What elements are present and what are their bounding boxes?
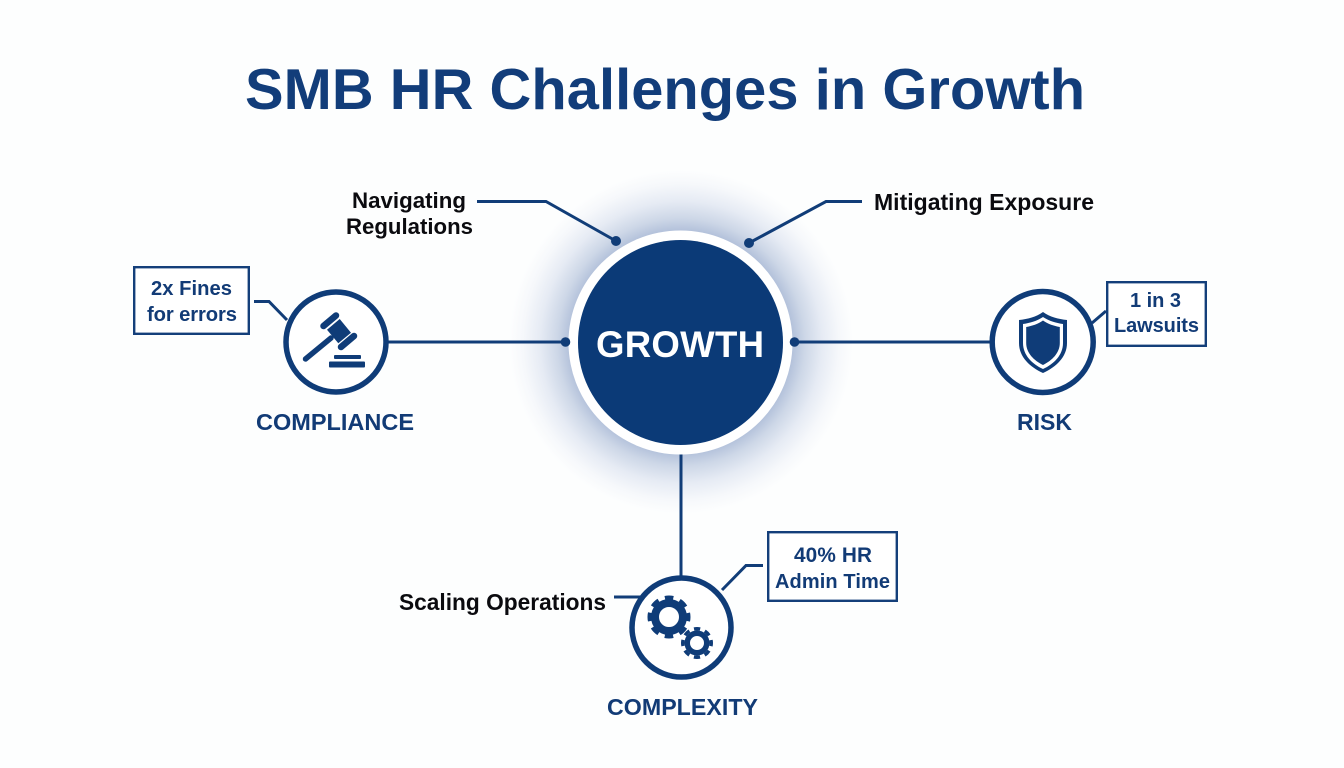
connector dot: risk side bbox=[790, 337, 799, 347]
central glow bbox=[509, 170, 853, 514]
stat box: 1 in 3 lawsuits: Lawsuits bbox=[1114, 315, 1199, 337]
connector: growth to complexity bbox=[680, 454, 682, 577]
label: compliance: COMPLIANCE bbox=[256, 409, 414, 435]
callout: navigating regulations: Navigating bbox=[352, 188, 466, 213]
panel: risk bbox=[992, 282, 1206, 435]
label: scaling operations: Scaling Operations bbox=[399, 589, 606, 615]
icon: gavel bbox=[286, 292, 386, 392]
stat box: 40% HR admin time: 40% HR bbox=[794, 544, 872, 567]
connector: growth to risk bbox=[795, 340, 990, 344]
leader line bbox=[254, 302, 287, 320]
connector dot: compliance side bbox=[561, 337, 570, 347]
icon: shield bbox=[992, 292, 1093, 392]
panel: complexity bbox=[399, 532, 897, 720]
label: risk: RISK bbox=[1017, 409, 1072, 435]
stat box: 2x fines: 2x Fines bbox=[151, 278, 232, 300]
callout: navigating regulations bbox=[346, 188, 621, 246]
title: SMB HR Challenges in Growth bbox=[245, 58, 1085, 122]
stat box: 40% HR admin time bbox=[768, 532, 897, 601]
stat box: 2x fines: for errors bbox=[147, 304, 237, 326]
central growth node bbox=[568, 230, 792, 454]
callout: mitigating exposure bbox=[744, 189, 1094, 248]
central growth node: GROWTH bbox=[596, 324, 764, 365]
callout: navigating regulations: Regulations bbox=[346, 214, 473, 239]
label: complexity: COMPLEXITY bbox=[607, 694, 759, 720]
stat box: 2x fines bbox=[134, 267, 249, 334]
leader line bbox=[722, 566, 763, 590]
leader line bbox=[1092, 311, 1106, 323]
stat box: 40% HR admin time: Admin Time bbox=[775, 571, 890, 593]
leader line to scaling operations bbox=[614, 596, 642, 598]
connector: growth to compliance bbox=[388, 340, 566, 344]
panel: compliance bbox=[134, 267, 414, 435]
stat box: 1 in 3 lawsuits bbox=[1107, 282, 1206, 346]
icon: gears bbox=[632, 578, 731, 677]
callout: mitigating exposure: Mitigating Exposure bbox=[874, 189, 1094, 215]
stat box: 1 in 3 lawsuits: 1 in 3 bbox=[1130, 290, 1181, 312]
